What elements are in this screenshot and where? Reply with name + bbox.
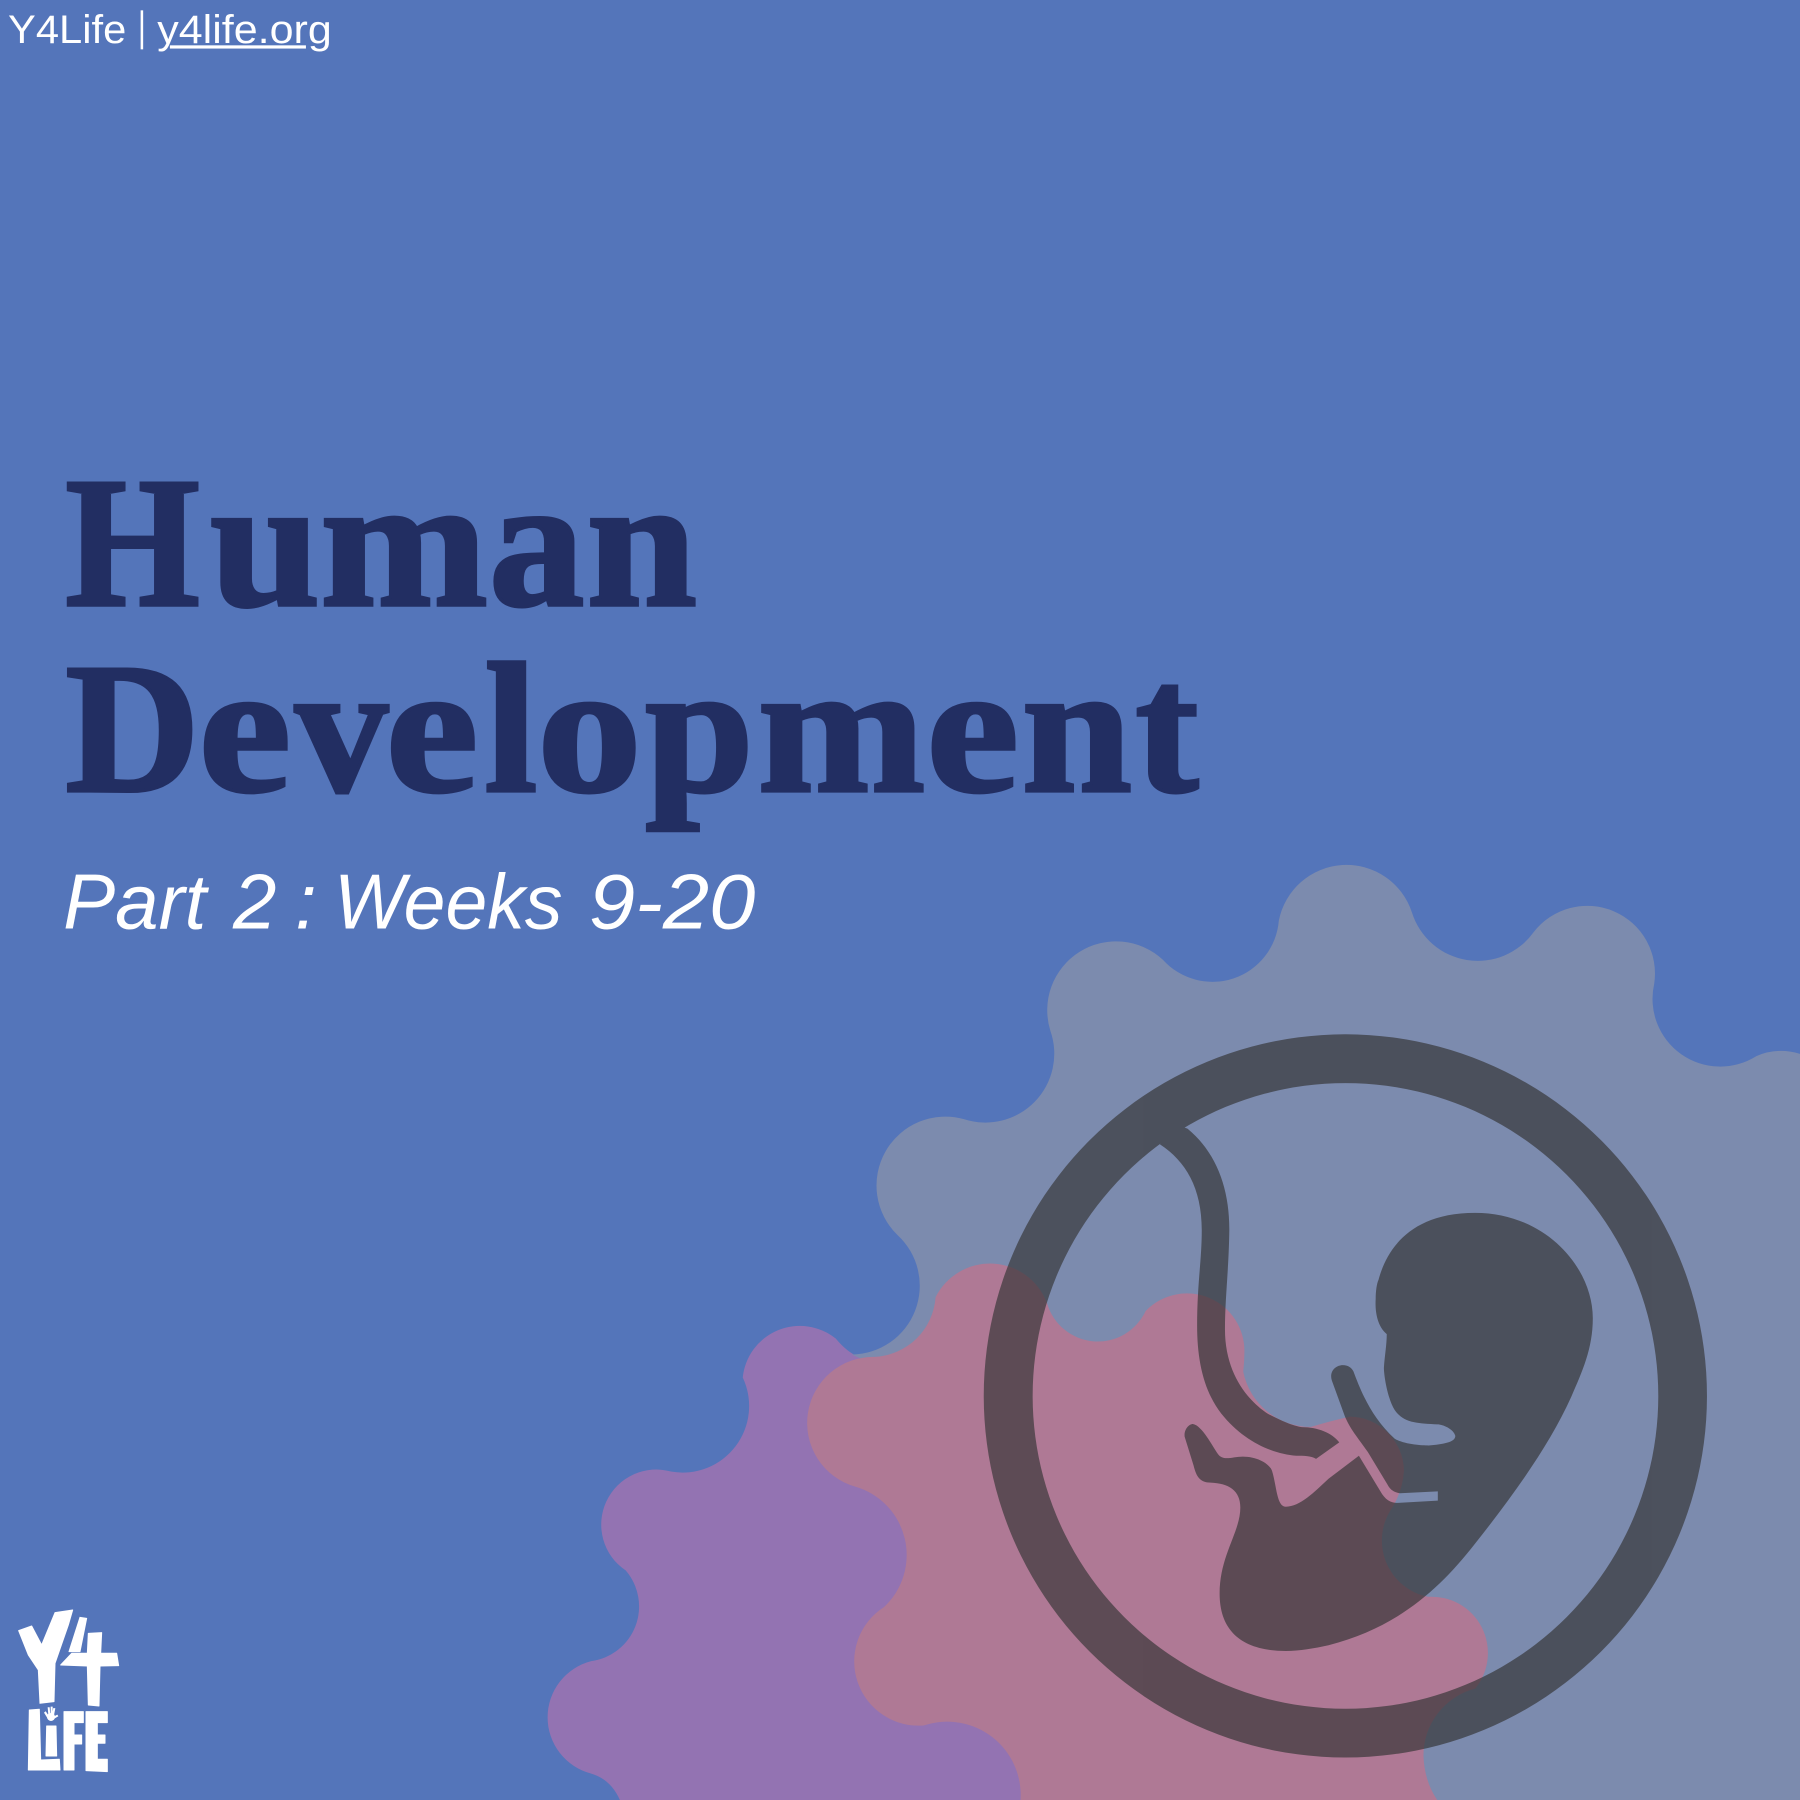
title line 1: a [489,440,584,646]
title line 2: t [1135,626,1199,832]
title line 2: p [645,626,754,832]
letter L [28,1709,60,1770]
logo: Y4 Life [19,1610,119,1772]
header: site credit [8,7,332,52]
title line 1: n [587,440,697,646]
letter E [86,1712,107,1772]
title line 2: n [1022,626,1132,832]
title line 1: m [320,440,488,646]
embryo and umbilical cord [1160,1123,1593,1651]
title line 2: e [199,626,291,832]
website link: y4life.org [157,7,332,52]
letter Y [19,1610,73,1703]
blob: grey-blue gear [852,865,1800,1800]
embryo body [1185,1213,1593,1651]
title line 2: l [484,626,537,832]
title line 2: e [926,626,1019,832]
title line 1: H [65,440,200,646]
subtitle: : [295,858,317,946]
separator [141,10,143,49]
subtitle: Weeks [334,858,562,946]
title line 2: D [65,626,200,832]
title line 2: o [537,626,642,832]
title [65,440,1199,832]
blob: purple gear [548,1326,1033,1800]
title line 2: e [386,626,478,832]
title line 1: u [210,440,320,646]
title line 2: m [758,626,925,832]
icon: embryo in womb [984,1034,1707,1758]
raised hand [44,1707,58,1721]
subtitle: 9-20 [589,858,755,946]
letter F [64,1712,83,1770]
umbilical cord [1160,1123,1339,1459]
title line 2: v [295,626,388,832]
letter I [46,1726,57,1756]
brand name: Y4Life [8,7,126,52]
subtitle: Part [63,858,210,946]
link underline [170,45,306,49]
subtitle: 2 [232,858,276,946]
womb ring [984,1034,1707,1758]
blob: pink gear [807,1264,1488,1800]
numeral 4 cross [61,1633,119,1706]
numeral 4 stroke [69,1617,87,1652]
